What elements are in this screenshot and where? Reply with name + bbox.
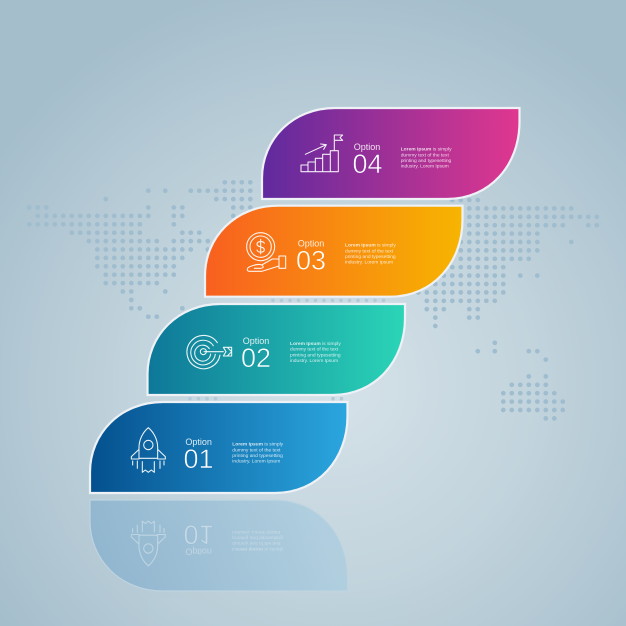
- icon: growth chart with flag: [301, 135, 343, 172]
- body text: dummy text of the text: [345, 248, 394, 254]
- number: 02: [241, 343, 271, 373]
- body text: [401, 147, 452, 170]
- option label: Option: [298, 238, 324, 248]
- panel: option 03: [205, 206, 462, 297]
- reflection of lower cards: [90, 108, 520, 626]
- number: 04: [352, 149, 383, 179]
- body text: Lorem Ipsum is simply: [401, 147, 452, 153]
- reflected card shape: [90, 500, 348, 591]
- body text: dummy text of the text: [290, 347, 339, 353]
- number: 03: [296, 246, 326, 276]
- body text: Lorem Ipsum is simply: [290, 341, 341, 347]
- card shape: [90, 402, 348, 493]
- reflected body text: industry. Lorem Ipsum: [232, 529, 280, 535]
- option label: Option: [185, 437, 212, 447]
- body text: printing and typesetting: [345, 254, 396, 260]
- icon: target with arrow: [187, 335, 232, 369]
- reflected rocket icon: [131, 521, 165, 566]
- body text: dummy text of the text: [401, 152, 449, 158]
- world map: right dots: [418, 200, 597, 418]
- option label: Option: [354, 142, 380, 152]
- body text: Lorem Ipsum is simply: [345, 243, 396, 249]
- reflected body text: [232, 529, 284, 552]
- body text: [290, 341, 341, 364]
- body text: industry. Lorem Ipsum: [290, 358, 338, 364]
- body text: Lorem Ipsum is simply: [232, 442, 284, 448]
- reflected body text: dummy text of the text: [232, 540, 281, 546]
- option label: Option: [243, 336, 269, 346]
- reflected body text: printing and typesetting: [232, 534, 283, 540]
- reflected option text: Option: [185, 546, 212, 556]
- body text: industry. Lorem Ipsum: [401, 164, 449, 170]
- world map: left dots: [29, 182, 250, 317]
- reflected body text: Lorem Ipsum is simply: [232, 546, 284, 552]
- body text: [345, 243, 396, 266]
- number: 01: [183, 444, 214, 474]
- reflected number: 01: [183, 520, 214, 550]
- card shape: [262, 108, 520, 199]
- card shape: [148, 304, 405, 395]
- panel: option 04: [262, 108, 520, 199]
- body text: [232, 442, 284, 465]
- world map: dots between cards: [190, 300, 388, 399]
- body text: industry. Lorem Ipsum: [345, 260, 393, 266]
- reflection: card 01: [90, 500, 348, 591]
- body text: printing and typesetting: [290, 352, 341, 358]
- reflected contents: [131, 520, 284, 566]
- panel: option 02: [148, 304, 405, 395]
- body text: printing and typesetting: [232, 453, 283, 459]
- icon: coin on hand: [247, 233, 286, 271]
- icon: rocket: [131, 428, 165, 472]
- reflection: card 02: [148, 598, 405, 626]
- body text: industry. Lorem Ipsum: [232, 459, 280, 465]
- body text: printing and typesetting: [401, 158, 452, 164]
- body text: dummy text of the text: [232, 447, 281, 453]
- panel: option 01: [90, 402, 348, 493]
- card shape: [205, 206, 462, 297]
